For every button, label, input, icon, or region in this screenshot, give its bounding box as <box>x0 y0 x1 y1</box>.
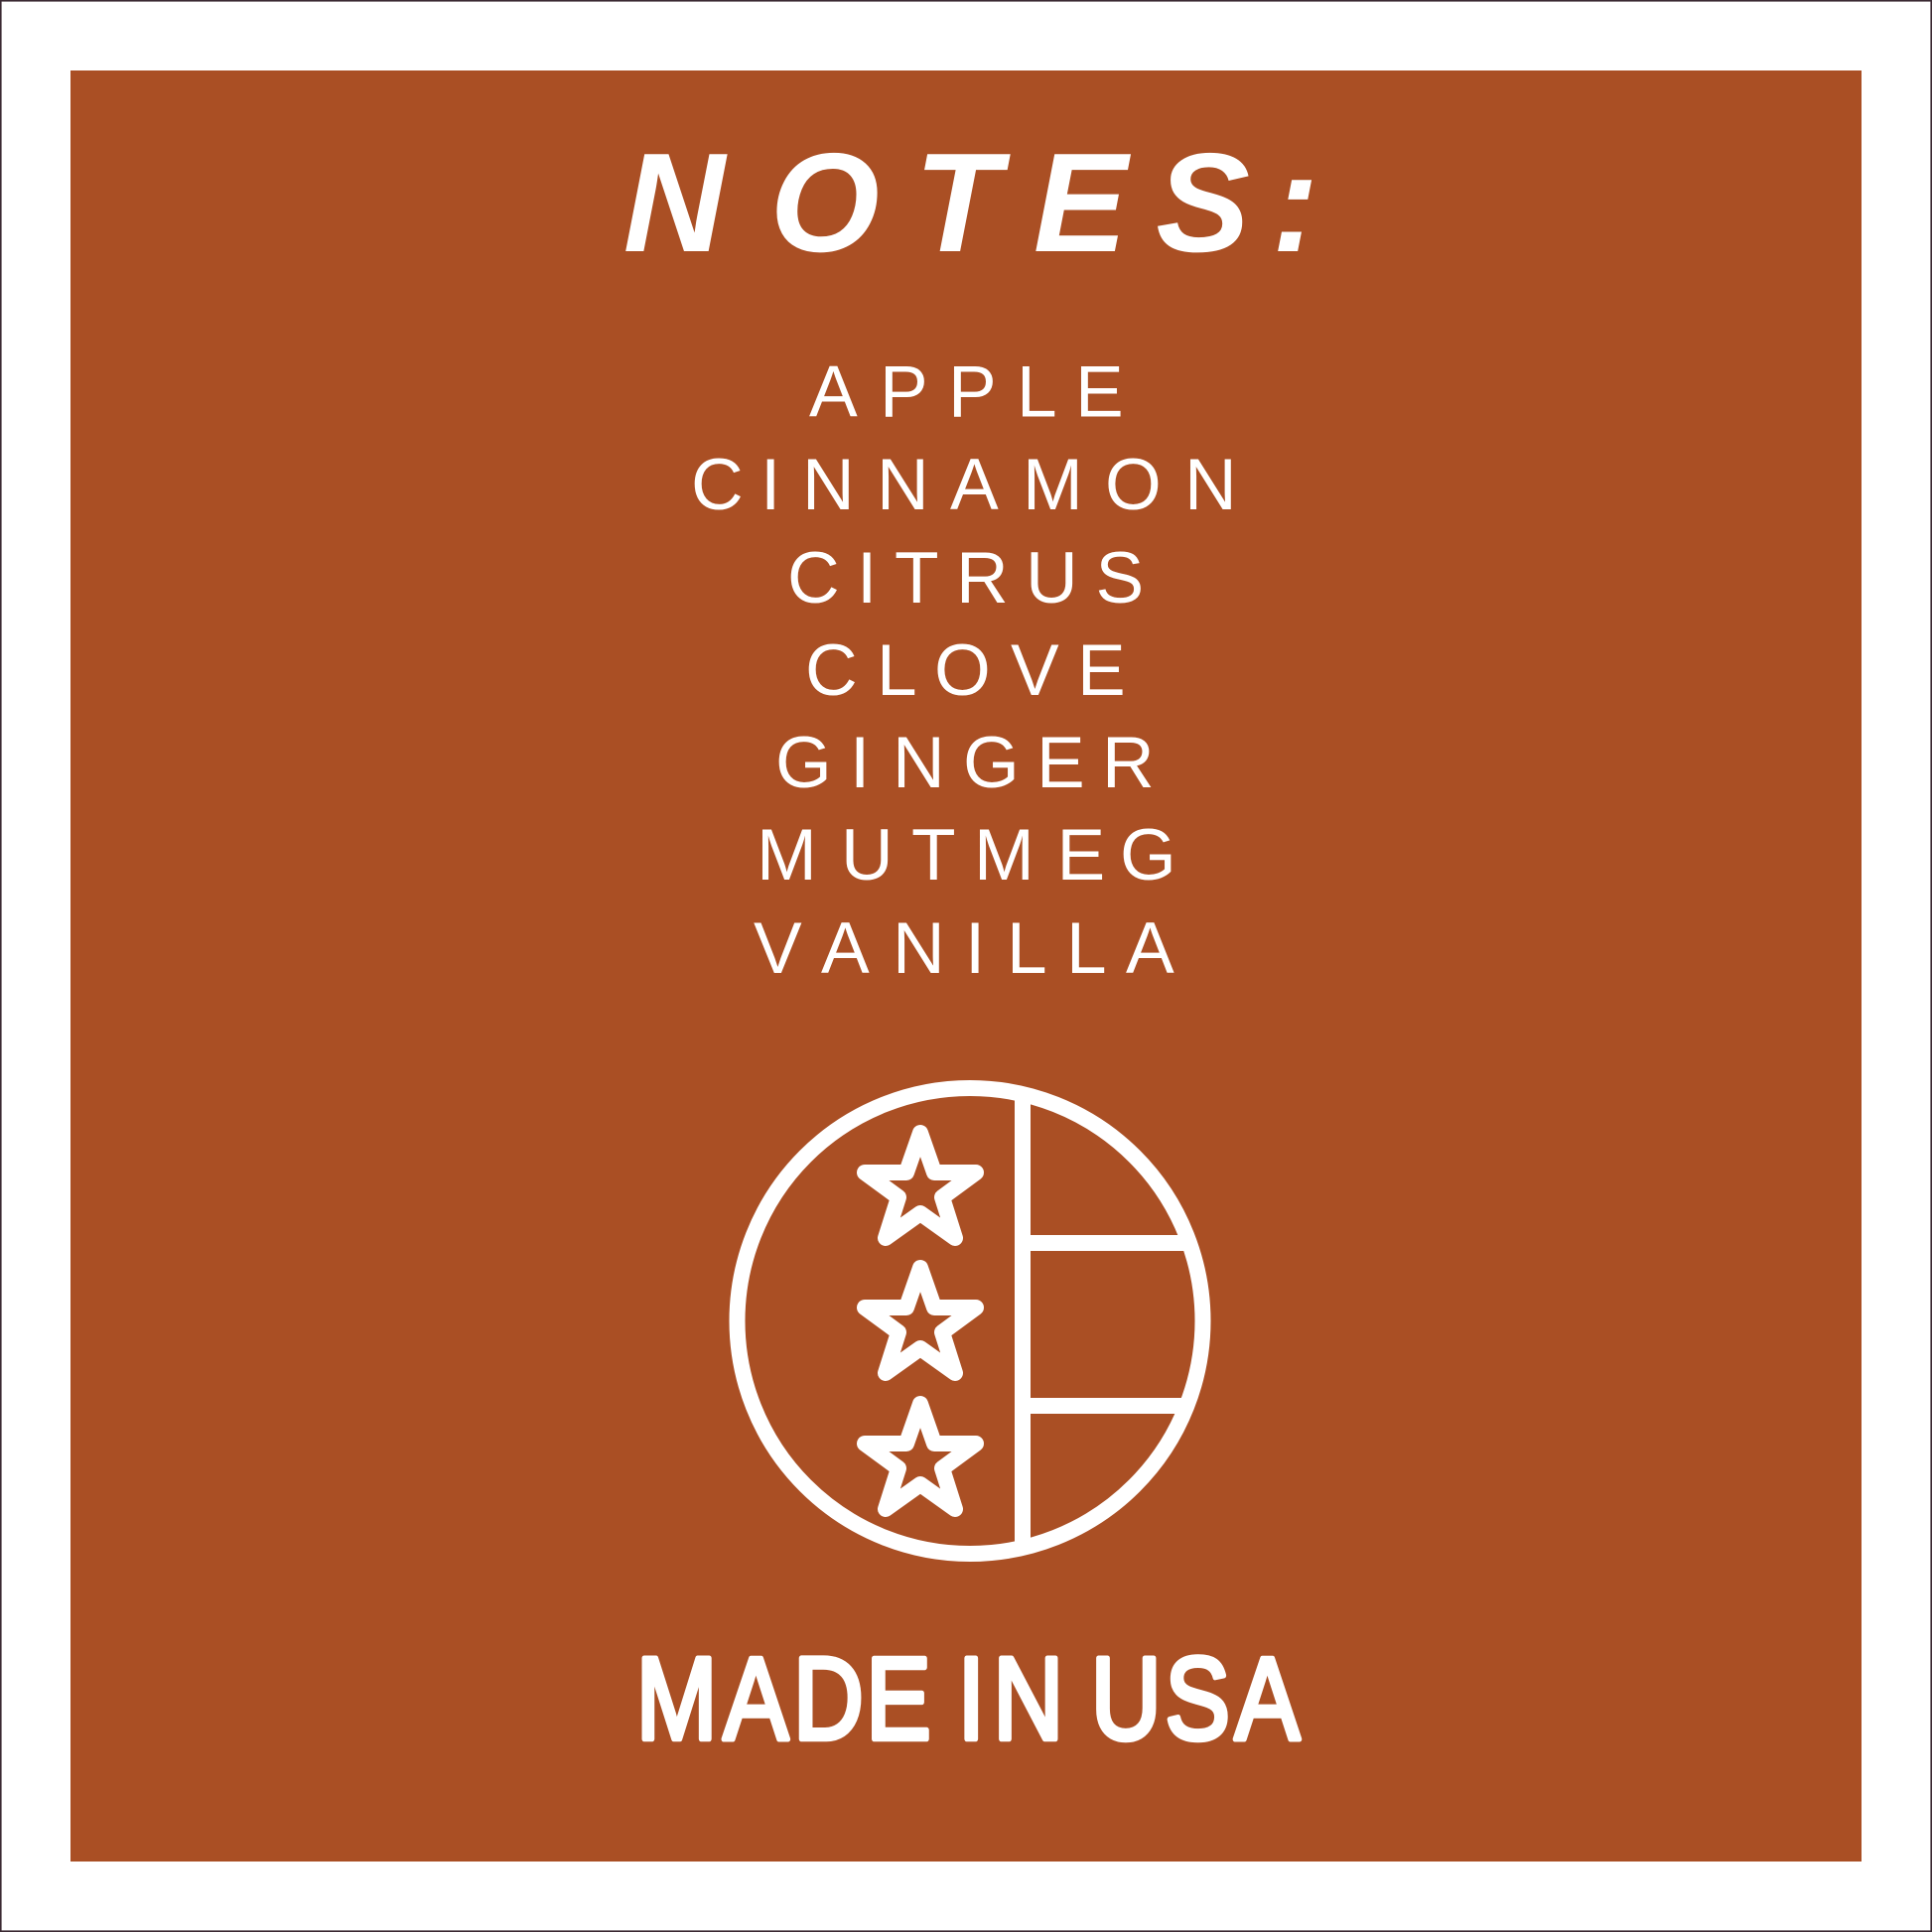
text block: notes list: APPLE <box>809 351 1124 433</box>
text block: notes list <box>691 351 1237 989</box>
title: NOTES: <box>623 124 1318 282</box>
icon: circular flag with three stars <box>737 1082 1211 1559</box>
text block: notes list: GINGER <box>775 723 1155 803</box>
footer text: made in usa: MADE IN USA <box>636 1633 1301 1764</box>
text block: notes list: CLOVE <box>805 630 1126 711</box>
text block: notes list: MUTMEG <box>757 815 1176 896</box>
text block: notes list: CITRUS <box>787 538 1144 619</box>
text block: notes list: VANILLA <box>754 908 1174 989</box>
text block: notes list: CINNAMON <box>691 445 1237 525</box>
